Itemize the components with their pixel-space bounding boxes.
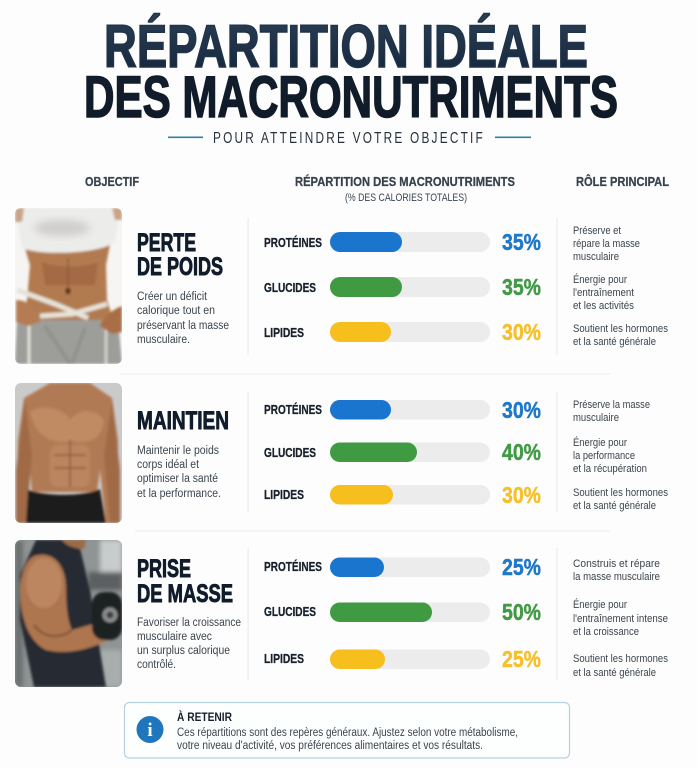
column header: répartition: RÉPARTITION DES MACRONUTRIMENTS (295, 174, 515, 189)
bar: lipides 30%: LIPIDES (264, 326, 304, 340)
role text: musculaire (573, 251, 619, 263)
panel: maintien (15, 383, 668, 523)
callout text: votre niveau d'activité, vos préférences alimentaires et vos résultats. (177, 740, 483, 752)
role text: Préserve la masse (573, 399, 650, 411)
role text (573, 558, 668, 679)
role text: et la croissance (573, 626, 639, 638)
bar: protéines 30%: PROTÉINES (264, 402, 322, 417)
role text (573, 399, 668, 512)
role text: Énergie pour (573, 273, 627, 286)
panel: perte de poids (15, 208, 668, 364)
bar: protéines 35% (264, 229, 541, 255)
role text: Soutient les hormones (573, 653, 668, 665)
role text: et les activités (573, 300, 634, 312)
description: préservant la masse (137, 320, 229, 332)
heading: perte de poids: DE POIDS (137, 253, 223, 281)
callout text: Ces répartitions sont des repères généraux. Ajustez selon votre métabolisme, (177, 727, 518, 739)
role text: Énergie pour (573, 598, 627, 611)
description (137, 445, 221, 500)
description: corps idéal et (137, 459, 200, 471)
bar: lipides 25%: LIPIDES (264, 652, 304, 666)
description: Maintenir le poids (137, 445, 219, 457)
bar: lipides 30%: 30% (502, 482, 541, 508)
callout: à retenir (124, 702, 570, 758)
column header: répartition (295, 174, 515, 204)
role text: Construis et répare (573, 558, 660, 570)
bar: protéines 30% (264, 397, 541, 423)
description: Créer un déficit (137, 291, 208, 303)
heading: perte de poids: PERTE (137, 229, 196, 257)
bar: glucides 35%: 35% (502, 274, 541, 300)
role text: la masse musculaire (573, 571, 660, 583)
heading: prise de masse: DE MASSE (137, 580, 233, 608)
role text (573, 225, 668, 348)
bar: protéines 35%: PROTÉINES (264, 235, 322, 250)
role text: Soutient les hormones (573, 323, 668, 335)
description (137, 291, 229, 346)
role text: Soutient les hormones (573, 487, 668, 499)
role text: et la santé générale (573, 500, 656, 512)
bar: lipides 25%: 25% (502, 646, 541, 672)
title (84, 13, 618, 130)
column header: rôle principal: RÔLE PRINCIPAL (576, 174, 669, 189)
role text: l'entraînement intense (573, 613, 668, 625)
role text: Préserve et (573, 225, 621, 237)
description: musculaire. (137, 334, 190, 346)
bar: lipides 25% (264, 646, 541, 672)
bar: glucides 50%: 50% (502, 599, 541, 625)
role text: répare la masse (573, 238, 640, 250)
bar: glucides 40%: GLUCIDES (264, 446, 316, 460)
bar: glucides 35%: GLUCIDES (264, 281, 316, 295)
bar: glucides 50% (264, 599, 541, 625)
bar: glucides 50%: GLUCIDES (264, 605, 316, 619)
heading: perte de poids (137, 229, 223, 281)
bar: glucides 35% (264, 274, 541, 300)
icon: info (136, 716, 164, 743)
description: Favoriser la croissance (137, 617, 241, 629)
description: un surplus calorique (137, 645, 230, 657)
bar: protéines 25%: 25% (502, 554, 541, 580)
role text: l'entraînement (573, 287, 634, 299)
role text: et la récupération (573, 463, 647, 475)
bar: protéines 35%: 35% (502, 229, 541, 255)
role text: musculaire (573, 412, 619, 424)
description: contrôlé. (137, 659, 176, 671)
heading: prise de masse (137, 555, 233, 608)
heading: prise de masse: PRISE (137, 555, 191, 583)
icon: info: i (147, 720, 153, 741)
bar: lipides 30%: 30% (502, 319, 541, 345)
bar: protéines 25%: PROTÉINES (264, 559, 322, 574)
bar: protéines 30%: 30% (502, 397, 541, 423)
description: optimiser la santé (137, 473, 218, 485)
photo: waist with measuring tape (15, 208, 122, 364)
role text: et la santé générale (573, 667, 656, 679)
description: musculaire avec (137, 631, 212, 643)
role text: et la santé générale (573, 336, 656, 348)
callout text: À RETENIR (177, 709, 232, 724)
bar: glucides 40%: 40% (502, 439, 541, 465)
role text: la performance (573, 450, 635, 462)
description: et la performance. (137, 488, 221, 500)
photo: muscular torso (15, 383, 122, 523)
description: calorique tout en (137, 305, 215, 317)
bar: lipides 30% (264, 482, 541, 508)
role text: Énergie pour (573, 436, 627, 449)
bar: glucides 40% (264, 439, 541, 465)
bar: lipides 30%: LIPIDES (264, 488, 304, 502)
panel: prise de masse (15, 540, 668, 687)
column header: objectif: OBJECTIF (85, 175, 139, 189)
column header: répartition: (% DES CALORIES TOTALES) (345, 192, 467, 204)
photo: man lifting a dumbbell (15, 540, 122, 687)
heading: maintien: MAINTIEN (137, 407, 229, 435)
callout text (177, 709, 518, 752)
description (137, 617, 241, 671)
bar: lipides 30% (264, 319, 541, 345)
bar: protéines 25% (264, 554, 541, 580)
subtitle: POUR ATTEINDRE VOTRE OBJECTIF (213, 130, 485, 147)
